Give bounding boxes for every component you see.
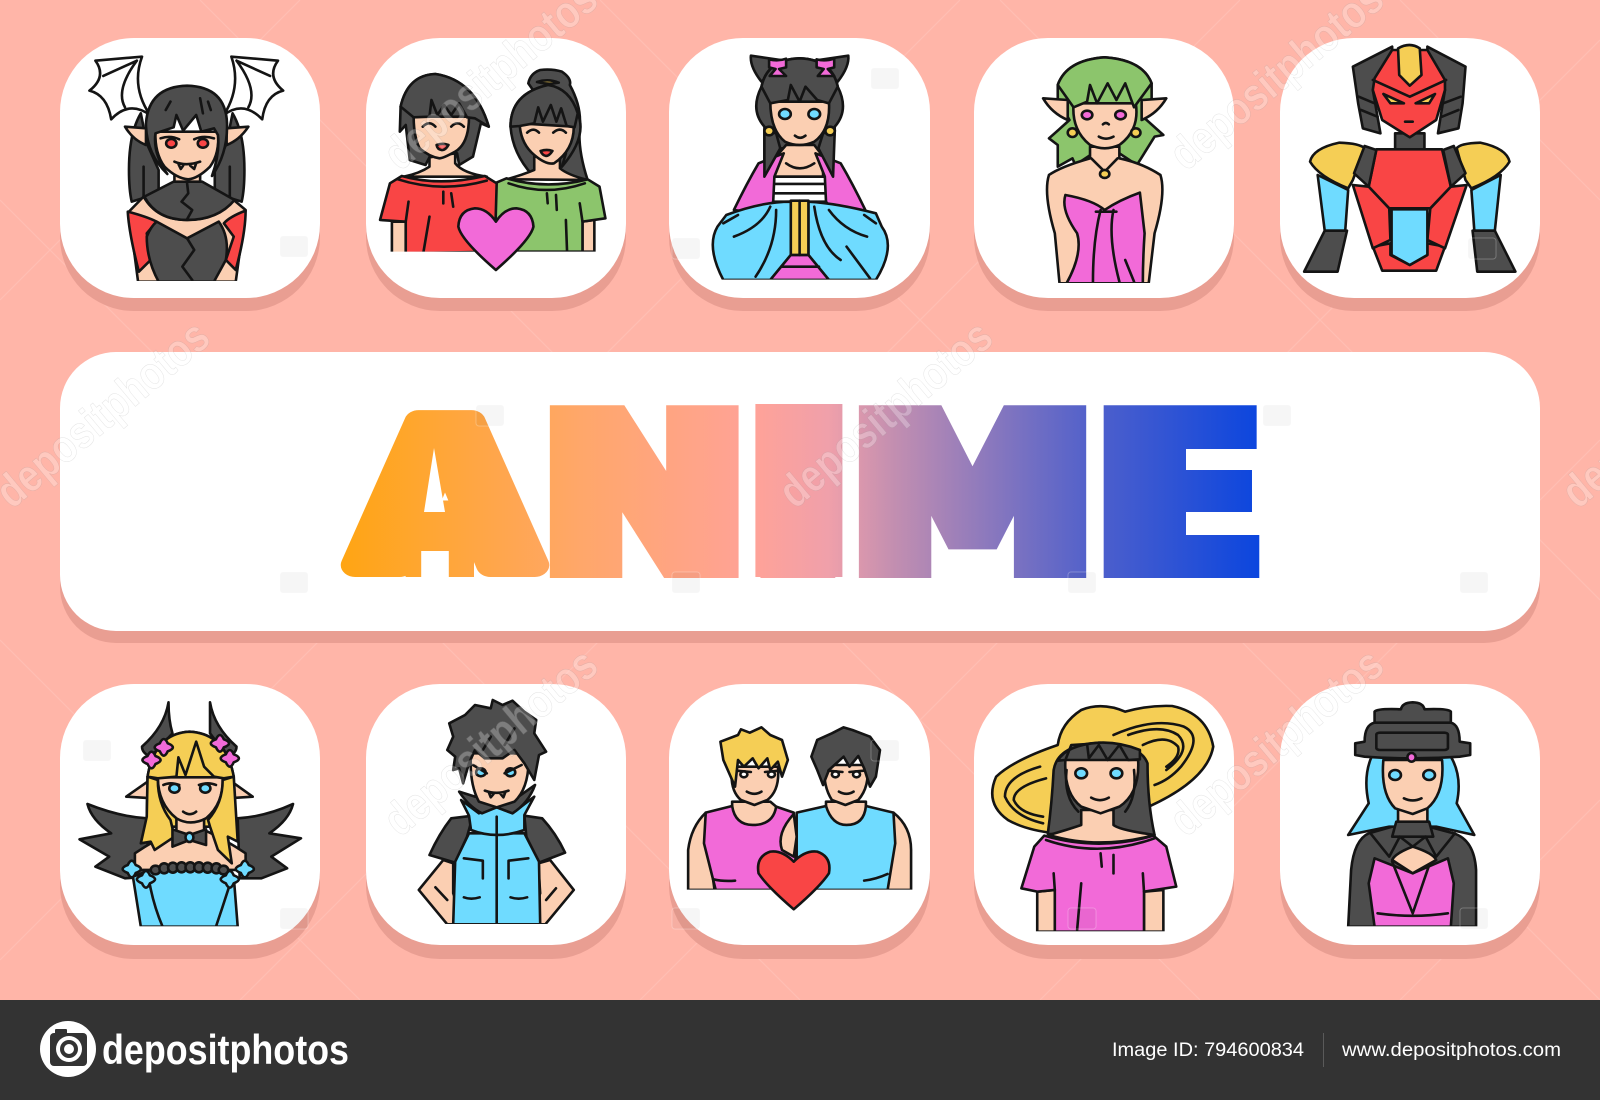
icon: vampire girl [89, 57, 283, 284]
card: vampire girl with bat wings [60, 38, 320, 311]
watermark: repeated depositphotos text: depositphotos [768, 309, 1002, 518]
card: two men with red heart [669, 684, 930, 959]
panel: central title banner [60, 352, 1540, 643]
watermark: repeated depositphotos text: depositphotos [1159, 637, 1393, 846]
card: red armored robot [1280, 38, 1540, 311]
icon: robot [1304, 45, 1515, 272]
card: cat-eared girl in hanfu [669, 38, 930, 311]
watermark: repeated depositphotos text: depositphotos [373, 637, 607, 846]
icon: horned blonde girl [80, 702, 301, 929]
card: horned blonde girl with dark wings [60, 684, 320, 959]
icon: sun hat girl [992, 706, 1213, 934]
icon: cat-eared girl [712, 56, 888, 283]
icon: camera logo [40, 1021, 96, 1077]
icon: green-haired elf [1043, 57, 1166, 286]
footer bar [0, 1000, 1600, 1100]
website: www.depositphotos.com [1341, 1040, 1561, 1061]
title: ANIME: A [354, 384, 536, 612]
card: blue-haired girl with VR headset [1280, 684, 1540, 959]
image id: Image ID: 794600834 [1112, 1040, 1304, 1061]
card: green-haired elf [974, 38, 1234, 311]
card: two smiling girls with pink heart [366, 38, 626, 311]
icon: two men and heart [685, 727, 914, 909]
title: ANIME: NIME [542, 378, 1263, 615]
card: girl with yellow sun hat [974, 684, 1234, 959]
card: vampire boy in blue vest [366, 684, 626, 959]
logo wordmark: depositphotos [102, 1026, 349, 1073]
icon: VR girl [1345, 702, 1479, 929]
icon: two girls and heart [380, 70, 605, 270]
watermark: repeated depositphotos text [0, 0, 1600, 846]
icon: vampire boy [419, 700, 574, 927]
